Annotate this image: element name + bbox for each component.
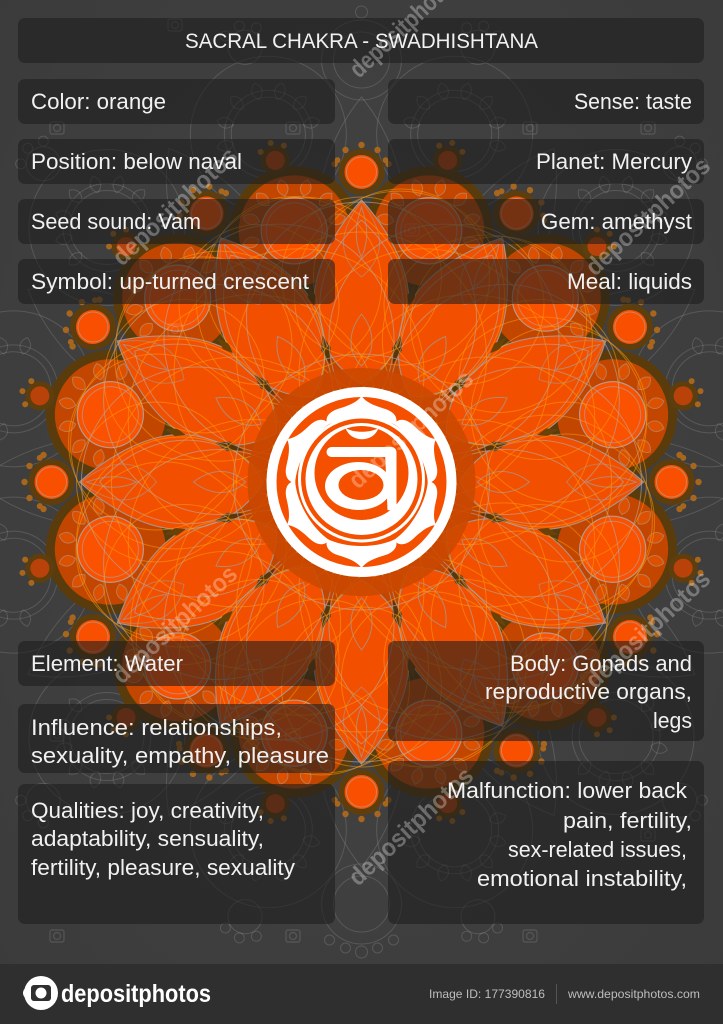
text: malfunction: pain, fertility, (563, 808, 692, 833)
panel: seed sound (18, 199, 335, 244)
text: color: Color: orange (31, 89, 166, 114)
panel: planet (388, 139, 704, 184)
text: qualities (31, 798, 295, 880)
text: influence: sexuality, empathy, pleasure (31, 743, 329, 768)
watermarks: depositphotos (107, 560, 243, 689)
watermarks: depositphotos (580, 565, 716, 694)
panel: position (18, 139, 335, 184)
text: symbol: Symbol: up-turned crescent (31, 269, 309, 294)
text: malfunction (447, 778, 692, 891)
footer image id: Image ID: 177390816 (429, 987, 545, 1001)
text: malfunction: Malfunction: lower back (447, 778, 688, 803)
mandala inner dark ring (256, 377, 466, 587)
panel: influence (18, 704, 335, 773)
text: position: Position: below naval (31, 149, 242, 174)
watermarks: depositphotos (107, 142, 243, 271)
text: body: legs (653, 708, 692, 733)
text: gem: Gem: amethyst (541, 209, 692, 234)
watermarks: depositphotos (343, 762, 479, 891)
text: influence: Influence: relationships, (31, 715, 282, 740)
text: qualities: adaptability, sensuality, (31, 826, 264, 851)
orange mandala (3, 124, 720, 840)
mandala line work (25, 146, 698, 818)
mandala satellite circles (21, 142, 702, 822)
watermarks: depositphotos (343, 365, 479, 494)
text: element: Element: Water (31, 651, 183, 676)
panel: symbol (18, 259, 335, 304)
text: body: reproductive organs, (485, 679, 692, 704)
panel: color (18, 79, 335, 124)
panel: title (18, 18, 704, 63)
panel: malfunction (388, 761, 704, 924)
footer logo text: depositphotos (61, 980, 211, 1008)
icon: depositphotos logo (23, 976, 58, 1010)
panel: element (18, 641, 335, 686)
watermarks (107, 0, 716, 891)
text: malfunction: sex-related issues, (508, 837, 687, 862)
mandala outer lobes (3, 124, 720, 840)
text: malfunction: emotional instability, (477, 866, 687, 891)
text: body: Body: Gonads and (510, 651, 692, 676)
mandala base disc (146, 267, 576, 697)
footer bar (0, 964, 723, 1024)
text: planet: Planet: Mercury (536, 149, 692, 174)
text: qualities: Qualities: joy, creativity, (31, 798, 264, 823)
heading: title: SACRAL CHAKRA - SWADHISHTANA (185, 30, 538, 53)
text: seed sound: Seed sound: Vam (31, 209, 201, 234)
text: influence (31, 715, 329, 768)
watermarks: depositphotos (580, 152, 716, 281)
panel: sense (388, 79, 704, 124)
text: body (485, 651, 692, 733)
mandala dark wedges (163, 284, 560, 680)
footer url: www.depositphotos.com (567, 987, 700, 1001)
watermark camera icons (50, 19, 655, 942)
panel: body (388, 641, 704, 741)
panel: qualities (18, 784, 335, 924)
sacral chakra symbol (266, 387, 456, 577)
mandala petals (80, 200, 644, 764)
text: meal: Meal: liquids (567, 269, 692, 294)
text: sense: Sense: taste (574, 89, 692, 114)
panel: meal (388, 259, 704, 304)
text: qualities: fertility, pleasure, sexuality (31, 855, 295, 880)
panel: gem (388, 199, 704, 244)
